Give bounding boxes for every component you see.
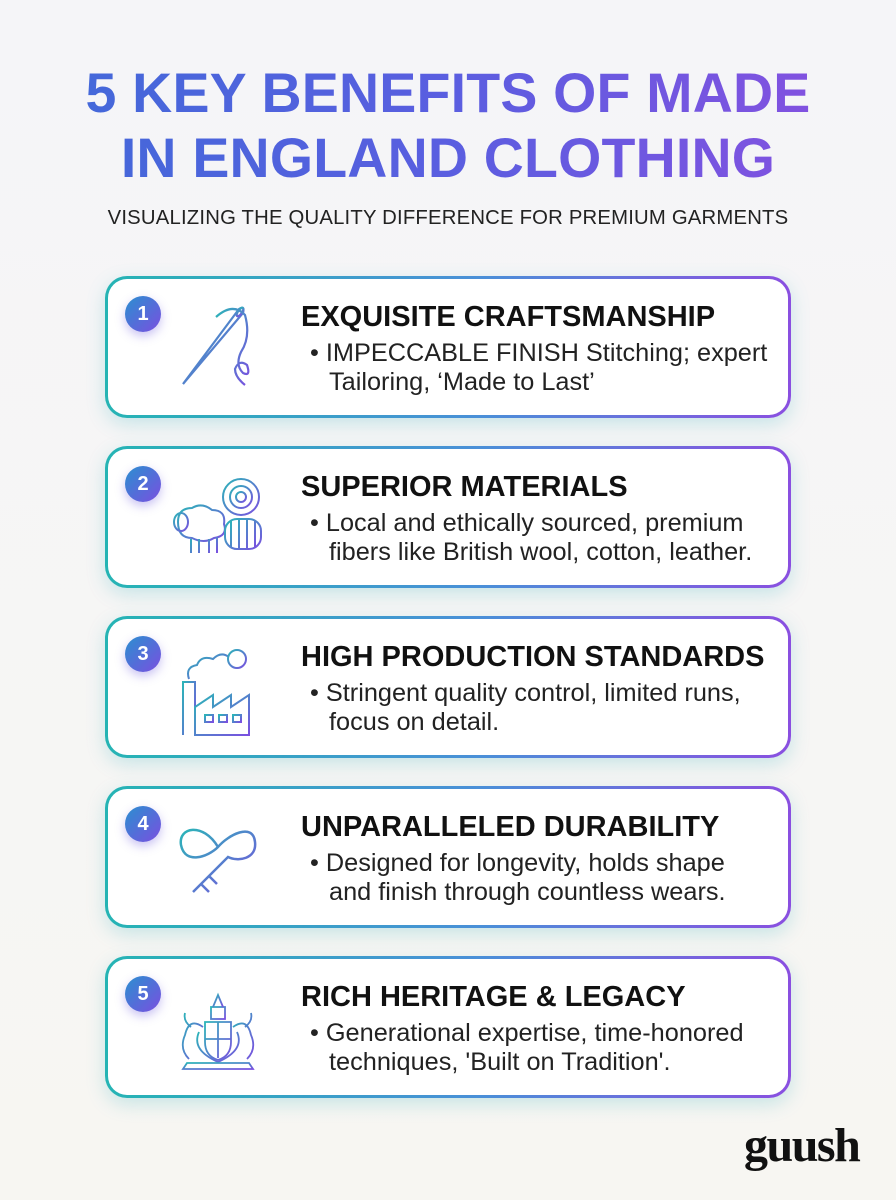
badge 1: 1 xyxy=(137,303,149,325)
text: techniques, 'Built on Tradition'. xyxy=(329,1048,671,1076)
heading: RICH HERITAGE & LEGACY xyxy=(301,981,686,1013)
subtitle: VISUALIZING THE QUALITY DIFFERENCE FOR PREMIUM GARMENTS xyxy=(108,207,788,229)
icon: factory xyxy=(182,649,250,736)
icon: infinity key xyxy=(180,828,256,893)
icon: sheep and yarn xyxy=(173,478,262,553)
text: • Local and ethically sourced, premium xyxy=(310,509,744,537)
badge 5 xyxy=(125,976,161,1012)
badge 5: 5 xyxy=(137,983,149,1005)
badge 3: 3 xyxy=(137,643,149,665)
badge 4 xyxy=(125,806,161,842)
panel: craftsmanship xyxy=(105,276,791,418)
text: • Stringent quality control, limited runs, xyxy=(310,679,741,707)
title: 5 KEY BENEFITS OF MADE xyxy=(86,62,810,124)
icon: coat of arms xyxy=(181,992,255,1070)
text: • IMPECCABLE FINISH Stitching; expert xyxy=(310,339,767,367)
text: fibers like British wool, cotton, leather. xyxy=(329,538,752,566)
panel: durability xyxy=(105,786,791,928)
text xyxy=(310,679,741,736)
icon: needle xyxy=(182,306,250,386)
heading: UNPARALLELED DURABILITY xyxy=(301,811,719,843)
text: Tailoring, ‘Made to Last’ xyxy=(329,368,595,396)
title: IN ENGLAND CLOTHING xyxy=(121,127,775,189)
text xyxy=(310,849,726,906)
panel: heritage xyxy=(105,956,791,1098)
badge 1 xyxy=(125,296,161,332)
badge 3 xyxy=(125,636,161,672)
panel: production xyxy=(105,616,791,758)
logo: guush xyxy=(744,1119,859,1172)
text xyxy=(310,339,768,396)
text: • Generational expertise, time-honored xyxy=(310,1019,744,1047)
text: • Designed for longevity, holds shape xyxy=(310,849,725,877)
heading: HIGH PRODUCTION STANDARDS xyxy=(301,641,764,673)
badge 2 xyxy=(125,466,161,502)
badge 2: 2 xyxy=(137,473,149,495)
text xyxy=(310,509,752,566)
text xyxy=(310,1019,744,1076)
heading: EXQUISITE CRAFTSMANSHIP xyxy=(301,301,715,333)
heading: SUPERIOR MATERIALS xyxy=(301,471,628,503)
text: and finish through countless wears. xyxy=(329,878,726,906)
title xyxy=(0,61,896,191)
badge 4: 4 xyxy=(137,813,149,835)
text: focus on detail. xyxy=(329,708,499,736)
panel: materials xyxy=(105,446,791,588)
